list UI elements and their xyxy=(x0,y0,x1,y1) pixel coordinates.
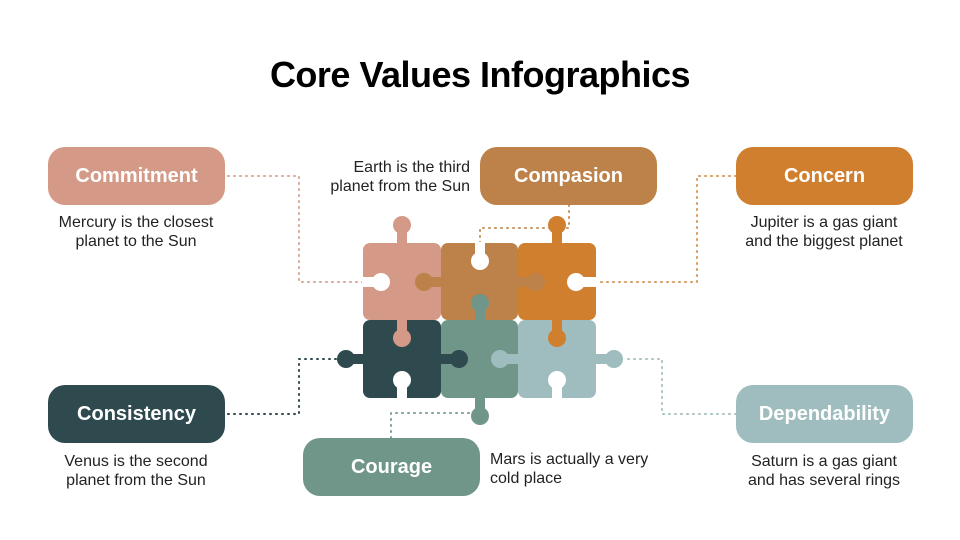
text: Dependability xyxy=(748,453,900,489)
label: Dependability xyxy=(736,385,913,443)
text: Courage xyxy=(490,451,648,487)
text: Dependability: and has several rings xyxy=(748,472,900,489)
label: Dependability: Dependability xyxy=(759,402,890,424)
knobs: brown xyxy=(415,273,545,291)
label: Commitment: Commitment xyxy=(75,164,198,186)
knobs: dark xyxy=(337,350,468,368)
label: Concern xyxy=(736,147,913,205)
text: Consistency xyxy=(64,453,208,489)
knobs: pink xyxy=(393,216,411,347)
text: Commitment: planet to the Sun xyxy=(76,233,196,250)
puzzle xyxy=(337,216,623,425)
knobs: light xyxy=(491,350,623,368)
label: Consistency: Consistency xyxy=(77,402,196,424)
label: Consistency xyxy=(48,385,225,443)
text: Compasion: planet from the Sun xyxy=(330,178,470,195)
text: Concern: Jupiter is a gas giant xyxy=(751,214,897,231)
text: Commitment: Mercury is the closest xyxy=(59,214,213,231)
text: Commitment xyxy=(59,214,214,250)
piece bodies xyxy=(363,243,596,398)
label: Concern: Concern xyxy=(784,164,865,186)
knobs: sage xyxy=(471,294,489,425)
text: Courage: cold place xyxy=(490,470,562,487)
title: Core Values Infographics xyxy=(270,54,690,95)
holes xyxy=(362,242,597,399)
text: Concern: and the biggest planet xyxy=(745,233,903,250)
label: Commitment xyxy=(48,147,225,205)
text: Compasion xyxy=(330,159,470,195)
text: Consistency: planet from the Sun xyxy=(66,472,206,489)
knobs: orange xyxy=(548,216,566,347)
label: Compasion xyxy=(480,147,657,205)
text: Concern xyxy=(745,214,903,250)
text: Dependability: Saturn is a gas giant xyxy=(751,453,897,470)
text: Courage: Mars is actually a very xyxy=(490,451,648,468)
text: Compasion: Earth is the third xyxy=(354,159,470,176)
label: Courage: Courage xyxy=(351,456,432,478)
label: Compasion: Compasion xyxy=(514,164,623,186)
label: Courage xyxy=(303,438,480,496)
text: Consistency: Venus is the second xyxy=(64,453,208,470)
